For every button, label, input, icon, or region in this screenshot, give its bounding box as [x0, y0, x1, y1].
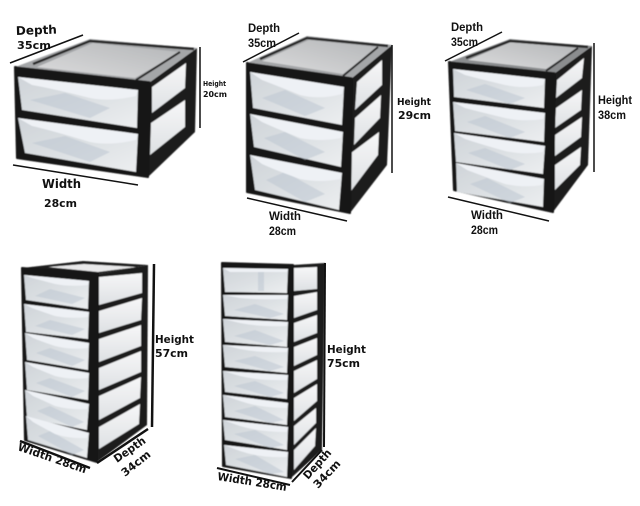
- annotations: 6 drawer unit: [16, 264, 194, 479]
- annotations: 3 drawer unit: [243, 23, 431, 238]
- drawer 3: [223, 319, 288, 347]
- drawer 1: [453, 69, 545, 108]
- height value: 75cm: [327, 357, 360, 370]
- side frame: [553, 46, 592, 212]
- width label: Width: [42, 177, 81, 191]
- side frame: [350, 45, 392, 213]
- depth label: Depth: [451, 22, 483, 34]
- top lid: [449, 39, 592, 73]
- lid panel: [262, 40, 378, 74]
- width line: [247, 198, 347, 221]
- depth label: Depth: [301, 447, 334, 482]
- top lid: [247, 36, 392, 78]
- side panes: [294, 267, 317, 470]
- height value: 20cm: [203, 90, 227, 99]
- drawer 3: [25, 333, 89, 370]
- depth value: 34cm: [119, 448, 153, 479]
- drawer 2: [223, 295, 288, 320]
- drawer 1: [18, 77, 138, 128]
- side panes: [555, 58, 584, 190]
- storage unit: 2 drawers: [15, 39, 197, 177]
- height line: [391, 45, 393, 173]
- side panes: [99, 273, 142, 449]
- height label: Height: [397, 97, 431, 108]
- front frame: [449, 62, 555, 212]
- side panes: [150, 63, 186, 155]
- height value: 38cm: [598, 110, 626, 122]
- height label: Height: [203, 80, 227, 88]
- drawer 6: [223, 395, 288, 425]
- depth value: 35cm: [248, 38, 276, 50]
- depth line: [292, 450, 322, 482]
- height label: Height: [598, 95, 632, 107]
- top lid: [15, 39, 197, 82]
- lid panel: [37, 43, 180, 78]
- height line: [152, 264, 154, 427]
- annotations: 8 drawer unit: [217, 263, 366, 494]
- storage unit: 8 drawers: [222, 263, 325, 478]
- width label: Width 28cm: [217, 470, 288, 494]
- lid edges: [15, 41, 194, 82]
- height label: Height: [155, 333, 194, 346]
- lid panel: [468, 42, 578, 69]
- height value: 57cm: [155, 347, 188, 360]
- depth line: [97, 429, 148, 463]
- width label: Width 28cm: [16, 441, 88, 476]
- depth label: Depth: [111, 434, 148, 465]
- drawer 8: [224, 445, 288, 477]
- side frame: [97, 265, 148, 462]
- drawer 2: [18, 118, 138, 172]
- width value: 28cm: [471, 225, 498, 237]
- width label: Width: [269, 211, 301, 223]
- drawer 4: [223, 345, 288, 373]
- width value: 28cm: [44, 197, 77, 210]
- depth line: [243, 33, 299, 62]
- drawer 2: [250, 114, 343, 167]
- drawer 5: [223, 371, 288, 399]
- drawer 3: [454, 133, 545, 174]
- width label: Width: [471, 210, 503, 222]
- depth value: 35cm: [17, 39, 51, 52]
- depth label: Depth: [16, 23, 57, 38]
- drawer 1: [250, 72, 344, 125]
- width line: [448, 197, 549, 221]
- storage unit: 4 drawers: [449, 39, 592, 212]
- drawer 3: [250, 155, 342, 210]
- drawer 1: [24, 275, 89, 309]
- side panes: [351, 60, 382, 191]
- height line: [593, 43, 595, 172]
- depth value: 34cm: [311, 457, 343, 491]
- lid edges: [247, 38, 388, 78]
- width line: [20, 441, 90, 468]
- front frame: [15, 67, 150, 177]
- drawer 5: [25, 390, 89, 430]
- height line: [324, 263, 325, 447]
- annotations: 4 drawer unit: [445, 22, 632, 237]
- width value: 28cm: [269, 226, 296, 238]
- depth line: [445, 32, 502, 61]
- annotations: 2 drawer unit: [10, 23, 227, 210]
- lid edges: [449, 41, 588, 73]
- drawer 2: [453, 102, 545, 142]
- front frame: [247, 63, 352, 213]
- depth value: 35cm: [451, 37, 478, 49]
- drawer 4: [25, 362, 89, 400]
- height line: [199, 47, 201, 128]
- front frame: [22, 268, 98, 462]
- width line: [13, 165, 138, 185]
- depth label: Depth: [248, 23, 280, 35]
- depth line: [10, 35, 83, 63]
- top lid: [22, 261, 148, 274]
- drawer 6: [26, 416, 89, 458]
- storage unit: 3 drawers: [247, 36, 392, 213]
- side frame: [148, 48, 197, 177]
- drawer 2: [24, 304, 89, 339]
- drawer 1: [223, 268, 288, 293]
- width line: [217, 468, 290, 485]
- lid panel: [48, 264, 137, 272]
- drawer 7: [223, 420, 288, 450]
- height label: Height: [327, 343, 366, 356]
- side frame: [291, 263, 325, 478]
- drawer 4: [456, 163, 544, 207]
- front frame: [222, 263, 293, 478]
- storage unit: 6 drawers: [22, 261, 148, 462]
- height value: 29cm: [398, 109, 431, 122]
